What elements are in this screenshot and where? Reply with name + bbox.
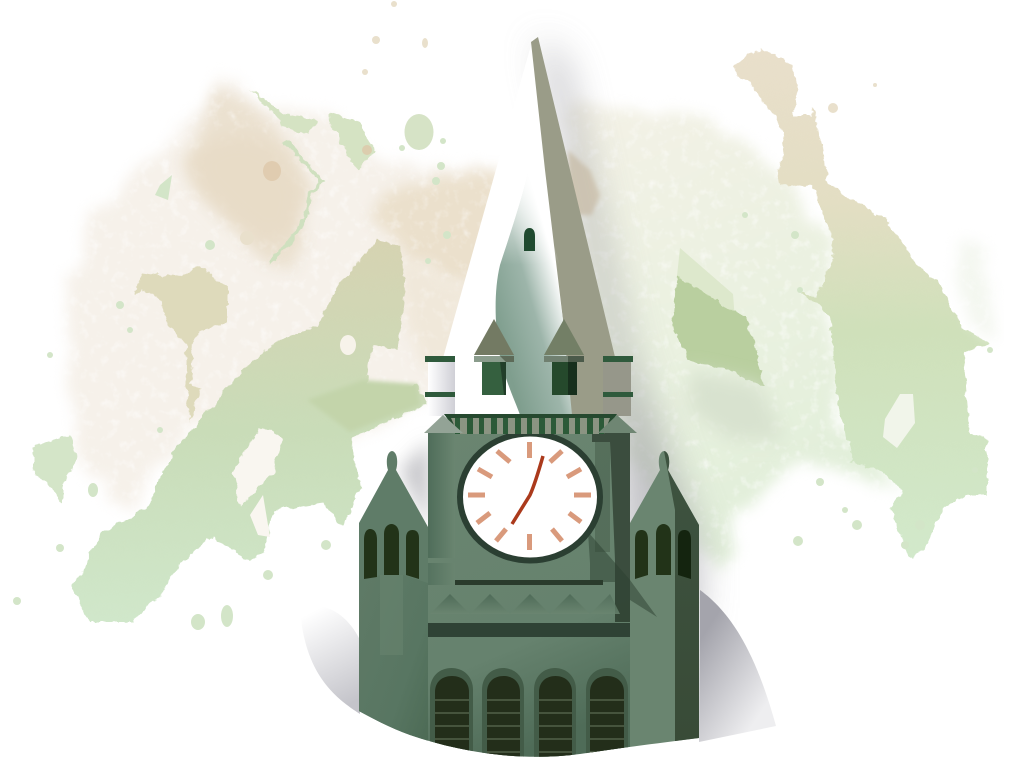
main shaft (428, 430, 630, 768)
right bell tower (630, 451, 699, 768)
shadow: gray behind left bell tower (400, 440, 430, 530)
spot: top circle (404, 114, 434, 150)
blotch: tan upper left (185, 90, 310, 273)
shaft right shadow column (592, 433, 630, 622)
blotch: tan and green right (733, 48, 990, 562)
hole: pale patch in green left (233, 427, 283, 507)
speckles: tan (240, 1, 877, 245)
clock hands (512, 456, 543, 524)
dark band (428, 623, 630, 637)
shaft lower pillar block (428, 563, 442, 585)
corner turret: left (425, 356, 455, 416)
clock face (460, 434, 600, 560)
blotch: dark green centre right (672, 276, 763, 384)
clock (460, 434, 600, 560)
shadow: left gray curve (300, 606, 360, 714)
watercolor background (13, 1, 995, 630)
blotch: green and olive left (73, 239, 427, 622)
blotch: gray-green below dark patch (690, 370, 785, 440)
spire: gray shaded face (531, 37, 615, 415)
hole: pale spot centre (340, 335, 356, 355)
sill under clock (455, 580, 603, 585)
arched windows (430, 668, 628, 760)
shadow: right gray curve (699, 590, 776, 742)
spire: white face (428, 38, 604, 415)
wash: beige band (377, 172, 500, 290)
blotch: tan mid left with tail (133, 266, 227, 423)
spire (428, 37, 615, 415)
wash: pale beige left (67, 74, 500, 518)
left tower lower body (359, 628, 428, 741)
shadow: soft gray to the right of spire (538, 38, 700, 620)
dormer: left (474, 319, 514, 395)
clock ticks (468, 442, 591, 550)
hole: small pale patch (250, 495, 270, 537)
right bell tower windows (635, 524, 691, 579)
arch 2 (482, 668, 524, 760)
decorative triangles (430, 594, 620, 614)
wash: pale right of spire (570, 101, 903, 566)
cornice (424, 414, 637, 434)
spire: teardrop top fade (500, 165, 560, 265)
blotch: darker olive patch (307, 380, 420, 432)
left bell tower (359, 451, 428, 768)
tower body (359, 430, 699, 768)
spot: tan pair near top (362, 145, 372, 155)
dormer: right (544, 319, 584, 395)
left bell tower windows (364, 524, 419, 579)
right tower dark side (664, 451, 699, 768)
speckles: green (13, 138, 993, 630)
wash: beige lower band (400, 254, 480, 385)
shaft shadow band next to column (595, 442, 610, 552)
arch 4 (586, 668, 628, 760)
blotch: green top left (250, 88, 317, 136)
spire: small arched window (524, 228, 535, 251)
shaft left pillar (428, 433, 446, 558)
hole: pale patch in green right (883, 394, 915, 448)
blotch: tan next to spire (568, 150, 600, 215)
blotch: tan spot on upper left (263, 161, 281, 181)
blotch: green top centre (327, 113, 377, 170)
clock shadow wedge (588, 532, 657, 622)
arch 1 (430, 668, 473, 760)
spire: teal teardrop (496, 165, 572, 415)
corner turret: right (603, 356, 633, 416)
blotch: tan core upper left (188, 134, 305, 245)
streak: green curve (270, 140, 322, 262)
arch 3 (534, 668, 576, 760)
spot: left green blob (33, 434, 78, 503)
blotch: light green above dark patch (677, 248, 735, 320)
sheet: white paper behind the tower (300, 535, 776, 758)
wash: pale right edge (950, 240, 995, 340)
